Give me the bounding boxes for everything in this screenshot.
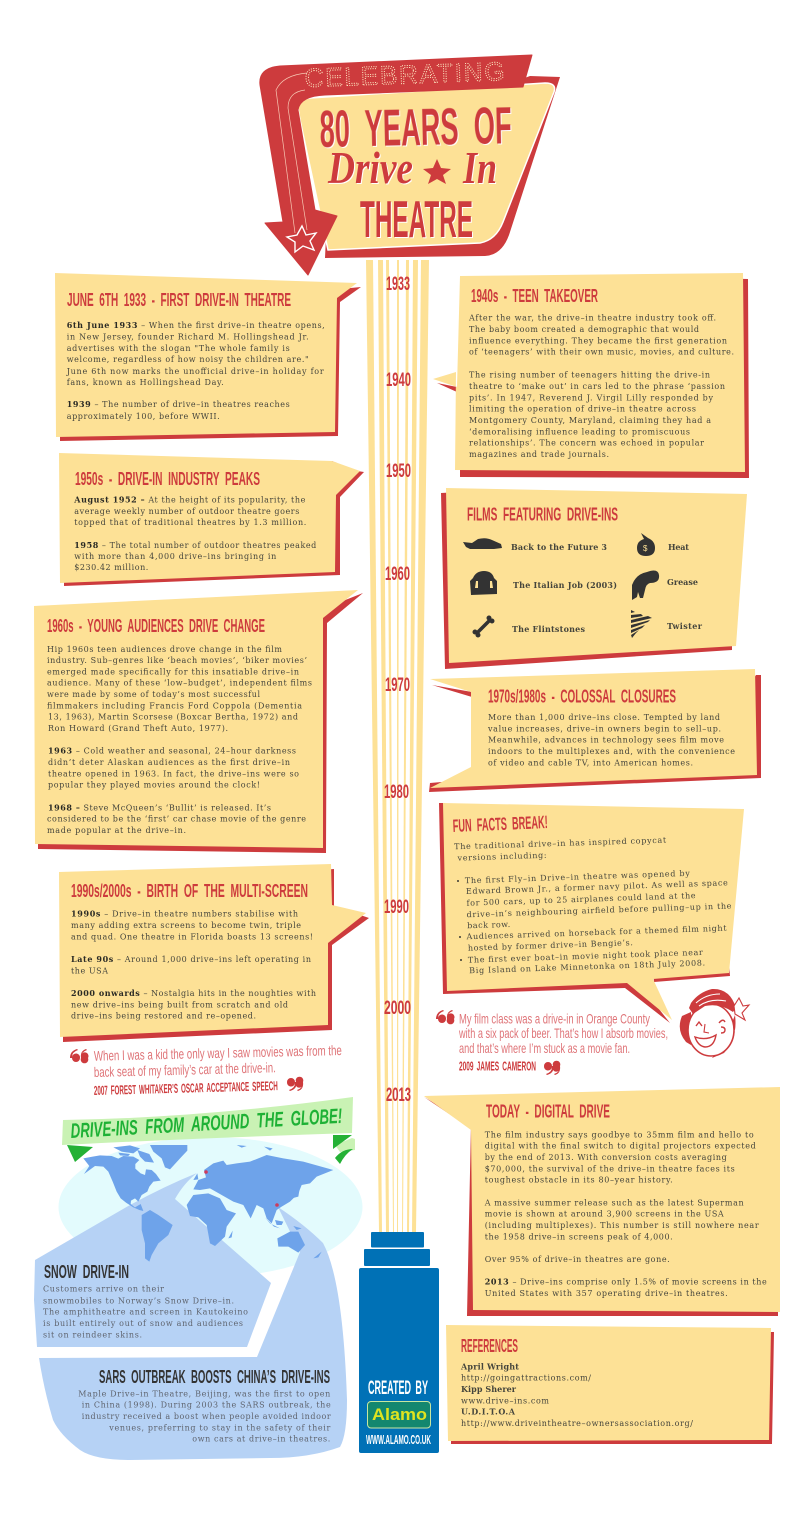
body text: digital with the final switch to digital projectors expected xyxy=(485,1142,756,1151)
body text: versions including: xyxy=(456,851,547,863)
quote: James Cameron: and that’s where I’m stuck as a movie fan. xyxy=(459,1040,630,1056)
heading: FILMS FEATURING DRIVE-INS xyxy=(467,505,618,525)
title sign xyxy=(260,55,560,275)
body text: The first ever boat–in movie night took place near xyxy=(468,948,703,965)
body text: The first Fly–in Drive–in theatre was opened by xyxy=(465,869,690,885)
body text: 6th June 1933 – When the first drive–in theatre opens, xyxy=(67,320,325,330)
body text: The film industry says goodbye to 35mm film and hello to xyxy=(485,1130,754,1139)
body text: The rising number of teenagers hitting the drive-in xyxy=(469,371,710,380)
body text: back row. xyxy=(467,920,510,930)
body text: A massive summer release such as the latest Superman xyxy=(484,1198,744,1207)
panel: 1990s/2000s xyxy=(59,864,369,1042)
body text: $230.42 million. xyxy=(74,563,148,572)
panel: films featuring drive-ins xyxy=(441,488,747,669)
body text: movie is shown at around 3,900 screens in the USA xyxy=(485,1210,724,1219)
timeline years: 1980 xyxy=(384,782,409,803)
reference list: Kipp Sherer xyxy=(461,1384,517,1394)
panel: today digital drive xyxy=(424,1087,780,1316)
body text: snowmobiles to Norway’s Snow Drive–in. xyxy=(43,1296,234,1305)
timeline film-projector light rays xyxy=(366,260,429,1232)
body text: Big Island on Lake Minnetonka on 18th July 2008. xyxy=(469,958,705,975)
body text: theatre opened in 1963. In fact, the drive–ins were so xyxy=(48,769,299,778)
panel: 1940s xyxy=(433,273,749,478)
timeline years xyxy=(384,274,411,1106)
body text: of video and cable TV, into American homes. xyxy=(488,758,693,767)
body text xyxy=(66,320,325,421)
opening quote mark xyxy=(436,1010,454,1024)
film label: Grease xyxy=(667,577,698,587)
body text: theatre to ‘make out’ in cars led to the phrase ‘passion xyxy=(469,382,725,391)
film label: Back to the Future 3 xyxy=(511,542,607,552)
star xyxy=(287,226,316,252)
reference list: U.D.I.T.O.A xyxy=(461,1407,516,1417)
heading: 80 years of: 80 YEARS OF xyxy=(319,97,512,159)
panel: June 6th 1933 xyxy=(55,273,361,441)
body text: average weekly number of outdoor theatre goers xyxy=(74,507,299,516)
body text: magazines and trade journals. xyxy=(469,450,609,459)
body text: The baby boom created a demographic that would xyxy=(469,325,699,334)
film label: The Italian Job (2003) xyxy=(513,580,617,590)
body text: Over 95% of drive–in theatres are gone. xyxy=(485,1255,670,1264)
body text: advertises with the slogan "The whole family is xyxy=(67,344,290,353)
body text: June 6th now marks the unofficial drive–in holiday for xyxy=(66,367,324,376)
world map xyxy=(83,1145,333,1262)
heading: SNOW DRIVE-IN xyxy=(44,1262,129,1282)
panel: 1970s/1980s xyxy=(429,669,761,792)
film icon: bone xyxy=(473,616,494,637)
projector: created by Alamo: CREATED BY xyxy=(368,1378,428,1399)
body text xyxy=(78,1390,331,1444)
body text: 1963 – Cold weather and seasonal, 24–hour darkness xyxy=(48,746,296,756)
body text xyxy=(73,495,316,572)
body text xyxy=(487,713,735,767)
body text: emerged made specifically for this insatiable drive–in xyxy=(47,667,299,676)
film icon: money bag: $ xyxy=(643,544,648,553)
body text xyxy=(468,314,734,459)
body text: many adding extra screens to become twin, triple xyxy=(71,921,301,930)
body text: filmmakers including Francis Ford Coppola (Dementia xyxy=(47,701,302,710)
world section xyxy=(34,1097,362,1460)
timeline years: 1950 xyxy=(386,461,411,482)
quote: James Cameron: My film class was a drive-in in Orange County xyxy=(459,1010,650,1026)
body text: topped that of traditional theatres by 1.3 million. xyxy=(74,518,306,527)
body text: Meanwhile, advances in technology sees film move xyxy=(488,736,724,745)
globe backdrop xyxy=(58,1137,362,1277)
body text: drive–in’s neighbouring airfield before pulling–up in the xyxy=(466,902,732,919)
panel: 1960s xyxy=(34,590,363,853)
panel: references xyxy=(446,1325,774,1444)
body text: popular they played movies around the clock! xyxy=(48,781,260,790)
film icon: twister xyxy=(631,610,652,638)
body text: 1990s – Drive–in theatre numbers stabilise with xyxy=(71,909,298,919)
body text: own cars at drive–in theatres. xyxy=(192,1435,330,1444)
body text: and quad. One theatre in Florida boasts 13 screens! xyxy=(71,932,313,941)
reference list: April Wright xyxy=(460,1361,519,1371)
timeline years: 1933 xyxy=(386,274,410,295)
body text: indoors to the multiplexes and, with the convenience xyxy=(488,747,735,756)
body text: of ‘teenagers’ with their own music, movies, and culture. xyxy=(469,348,734,357)
body text: in China (1998). During 2003 the SARS outbreak, the xyxy=(82,1401,331,1410)
body text: audience. Many of these ‘low–budget’, independent films xyxy=(47,679,312,688)
body text: the USA xyxy=(71,966,108,975)
body text: 2013 – Drive–ins comprise only 1.5% of movie screens in the xyxy=(485,1277,767,1287)
body text xyxy=(454,836,732,975)
body text: the 1958 drive–in screens peak of 4,000. xyxy=(485,1232,673,1241)
body text: Edward Brown Jr., a former navy pilot. As well as space xyxy=(466,878,728,896)
body text: Montgomery County, Maryland, claiming they had a xyxy=(469,416,711,425)
body text: pits’. In 1947, Reverend J. Virgil Lilly responded by xyxy=(469,393,713,402)
quote: Forest Whitaker: back seat of my family’s car at the drive-in. xyxy=(94,1059,276,1080)
location marker: China xyxy=(275,1203,279,1207)
film label: The Flintstones xyxy=(512,624,585,634)
body text xyxy=(43,1285,248,1339)
body text: influence everything. They became the first generation xyxy=(469,336,727,345)
heading: 1950s - DRIVE-IN INDUSTRY PEAKS xyxy=(75,469,260,489)
body text: drive–ins being restored and re–opened. xyxy=(71,1012,256,1021)
title sign: THEATRE xyxy=(360,191,473,249)
location marker: Norway xyxy=(204,1170,208,1174)
quote: Forest Whitaker: 2007 FOREST WHITAKER’S OSCAR ACCEPTANCE SPEECH xyxy=(94,1078,278,1098)
body text: sit on reindeer skins. xyxy=(43,1330,142,1339)
body text: venues, preferring to stay in the safety of their xyxy=(108,1423,330,1432)
body text: (including multiplexes). This number is still nowhere near xyxy=(485,1221,759,1230)
heading: in: In xyxy=(462,142,497,193)
quote: Forest Whitaker xyxy=(70,1042,342,1098)
Alamo logo xyxy=(368,1402,430,1428)
panel: SARS outbreak xyxy=(39,1207,347,1460)
opening quote mark xyxy=(70,1049,88,1063)
body text: by the end of 2013. With conversion costs averaging xyxy=(485,1153,727,1162)
body text: approximately 100, before WWII. xyxy=(67,412,220,421)
timeline years: 1970 xyxy=(385,675,410,696)
quote: Forest Whitaker: When I was a kid the only way I saw movies was from the xyxy=(94,1042,342,1064)
body text xyxy=(47,645,312,835)
film icon: car side xyxy=(463,538,502,549)
Alamo logo: Alamo xyxy=(372,1405,427,1424)
quote: James Cameron: with a six pack of beer. That’s how I absorb movies, xyxy=(458,1025,668,1041)
body text: 1958 – The total number of outdoor theatres peaked xyxy=(74,540,316,550)
projector: created by Alamo: WWW.ALAMO.CO.UK xyxy=(366,1432,431,1447)
heading: DRIVE-INS FROM AROUND THE GLOBE! xyxy=(70,1105,343,1143)
reference list: http://www.driveintheatre–ownersassociation.org/ xyxy=(461,1419,693,1428)
film label: Heat xyxy=(668,542,689,552)
body text: Audiences arrived on horseback for a themed film night xyxy=(465,924,727,941)
body text: Late 90s – Around 1,000 drive–ins left operating in xyxy=(71,954,311,964)
body text: industry. Sub–genres like ‘beach movies’, ‘biker movies’ xyxy=(47,656,307,665)
body text xyxy=(484,1130,767,1298)
timeline years: 2000 xyxy=(384,998,411,1019)
sign backing xyxy=(325,76,560,258)
heading: TODAY - DIGITAL DRIVE xyxy=(486,1102,610,1122)
quote: James Cameron xyxy=(436,1010,668,1075)
reference list xyxy=(460,1361,693,1428)
panel: references: REFERENCES xyxy=(461,1336,518,1356)
body text: United States with 357 operating drive–in theatres. xyxy=(485,1289,728,1298)
heading: SARS OUTBREAK BOOSTS CHINA’S DRIVE-INS xyxy=(99,1367,330,1387)
heading: drive: Drive xyxy=(327,142,413,193)
body text: More than 1,000 drive–ins close. Tempted by land xyxy=(488,713,720,722)
body text: Maple Drive–in Theatre, Beijing, was the first to open xyxy=(78,1390,330,1399)
body text: considered to be the ‘first’ car chase movie of the genre xyxy=(47,815,306,824)
film icon: grease quiff xyxy=(632,571,659,600)
body text: for 500 cars, up to 25 airplanes could land at the xyxy=(466,891,696,908)
film label: Twister xyxy=(667,621,703,631)
panel: fun facts break xyxy=(439,803,744,1023)
body text: Hip 1960s teen audiences drove change in the film xyxy=(47,645,282,654)
body text: with more than 4,000 drive–ins bringing in xyxy=(74,552,276,561)
closing quote mark xyxy=(544,1061,560,1075)
sign face xyxy=(298,83,555,250)
panel: 1950s xyxy=(59,453,364,586)
body text: $70,000, the survival of the drive–in theatre faces its xyxy=(485,1164,735,1173)
body text: fans, known as Hollingshead Day. xyxy=(67,378,224,387)
body text: didn’t deter Alaskan audiences as the first drive–in xyxy=(48,758,290,767)
body text: hosted by former drive–in Bengie’s. xyxy=(468,938,633,953)
projector: created by Alamo xyxy=(359,1232,439,1453)
heading: FUN FACTS BREAK! xyxy=(452,812,548,836)
body text: 1939 – The number of drive–in theatres reaches xyxy=(67,399,290,409)
body text: is built entirely out of snow and audiences xyxy=(43,1319,243,1328)
body text: made popular at the drive–in. xyxy=(47,826,186,835)
body text: 1968 – Steve McQueen’s ‘Bullit’ is released. It’s xyxy=(48,802,271,812)
body text: relationships’. The concern was echoed in popular xyxy=(469,439,704,448)
closing quote mark xyxy=(287,1077,303,1091)
body text: The amphitheatre and screen in Kautokeino xyxy=(43,1308,248,1317)
body text: in New Jersey, founder Richard M. Hollingshead Jr. xyxy=(67,332,309,342)
body text: industry received a boost when people avoided indoor xyxy=(82,1412,331,1421)
timeline years: 1960 xyxy=(385,564,410,585)
body text xyxy=(71,909,316,1021)
celebrating: CELEBRATING xyxy=(304,56,505,93)
body text: 2000 onwards – Nostalgia hits in the noughties with xyxy=(71,988,316,998)
star divider xyxy=(423,159,451,184)
timeline years: 1940 xyxy=(386,370,411,391)
heading: 1960s - YOUNG AUDIENCES DRIVE CHANGE xyxy=(47,616,265,636)
body text: 13, 1963), Martin Scorsese (Boxcar Bertha, 1972) and xyxy=(48,713,298,722)
body text: Ron Howard (Grand Theft Auto, 1977). xyxy=(48,724,228,733)
arrow neon lines xyxy=(276,73,307,233)
timeline years: 2013 xyxy=(386,1085,411,1106)
heading: 1990s/2000s - BIRTH OF THE MULTI-SCREEN xyxy=(71,881,308,901)
timeline years: 1990 xyxy=(384,897,409,918)
film icon: car front xyxy=(470,571,497,595)
body text: limiting the operation of drive–in theatre across xyxy=(469,405,696,414)
film icon: money bag xyxy=(637,533,655,556)
body text: After the war, the drive–in theatre industry took off. xyxy=(468,314,716,323)
arrow arm and celebrating banner xyxy=(260,55,532,275)
heading: 1940s - TEEN TAKEOVER xyxy=(471,286,598,306)
body text: Customers arrive on their xyxy=(43,1285,164,1294)
body text: August 1952 – At the height of its popularity, the xyxy=(73,495,306,505)
body text: The traditional drive–in has inspired copycat xyxy=(454,836,667,851)
body text: value increases, drive–in owners begin to sell–up. xyxy=(487,724,721,733)
icon: cartoon girl xyxy=(680,989,749,1058)
heading: JUNE 6TH 1933 - FIRST DRIVE-IN THEATRE xyxy=(67,290,291,310)
green banner xyxy=(62,1097,355,1164)
panel: snow drive-in xyxy=(34,1173,271,1347)
body text: new drive–ins being built from scratch and old xyxy=(71,1000,288,1009)
body text: ‘demoralising influence leading to promiscuous xyxy=(469,427,690,436)
reference list: http://goingattractions.com/ xyxy=(461,1374,591,1383)
reference list: www.drive–ins.com xyxy=(461,1396,549,1405)
body text: welcome, regardless of how noisy the children are." xyxy=(67,355,309,364)
body text: toughest obstacle in its 80–year history. xyxy=(485,1176,673,1185)
quote: James Cameron: 2009 JAMES CAMERON xyxy=(459,1059,536,1074)
body text: were made by some of today’s most successful xyxy=(47,690,260,699)
